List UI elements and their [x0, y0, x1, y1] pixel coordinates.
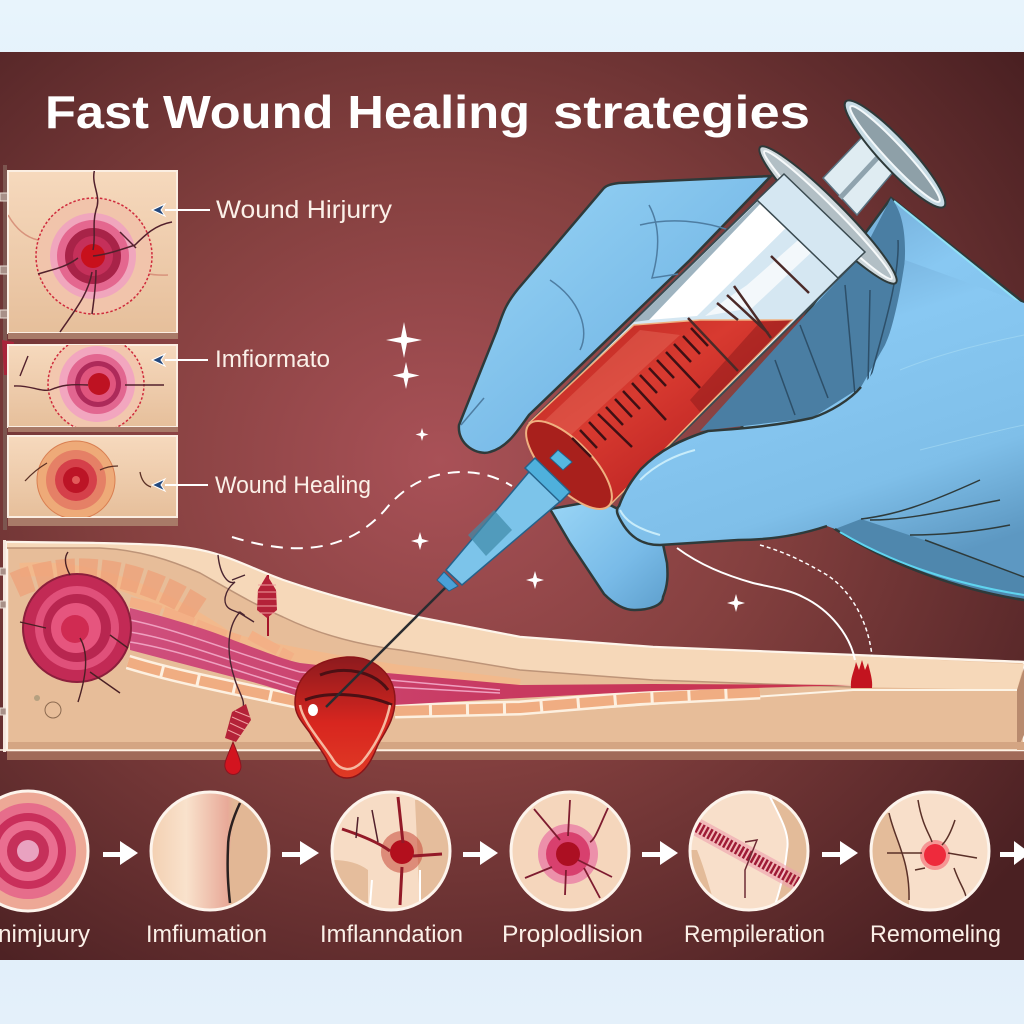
barrel opening [513, 408, 625, 522]
step 2 circle: influmation [151, 792, 270, 910]
arrow [1000, 841, 1024, 865]
panel: wound injury stage [8, 168, 178, 339]
step 6 circle: remodeling [865, 792, 989, 910]
arrow [822, 841, 858, 865]
step 1 circle: injury [0, 791, 88, 911]
blood fill [529, 320, 792, 506]
step labels: Remomeling [870, 921, 1001, 948]
hub and nozzle [446, 472, 563, 585]
title: strategies [553, 86, 810, 138]
arrow: wound injury [152, 204, 210, 216]
label: wound healing: Wound Healing [215, 472, 371, 499]
title: Fast Wound Healing [45, 86, 530, 138]
left wound rings [23, 574, 131, 682]
plunger [823, 91, 955, 217]
glove: lower finger [550, 500, 668, 610]
thin white curve, dashed curve and small wound [677, 545, 872, 688]
step 3 circle: inflammation [332, 792, 452, 915]
step labels [0, 921, 1001, 948]
title [45, 86, 810, 138]
glove: index and middle fingers [459, 176, 771, 453]
glove: thumb over syringe [617, 260, 1024, 600]
blood pool [295, 657, 395, 778]
barrel [529, 174, 865, 506]
arrow [463, 841, 498, 865]
step labels: Imflanndation [320, 921, 463, 948]
step labels: Proplodlision [502, 921, 643, 948]
blood drop small [225, 742, 241, 774]
panel: wound healing stage [8, 436, 178, 526]
fat cells upper [20, 569, 520, 686]
flange [750, 137, 906, 293]
dashed motion path [232, 472, 512, 548]
step 4 circle: proliferation [511, 792, 629, 910]
arrow [642, 841, 678, 865]
label: inflammation: Imfiormato [215, 346, 330, 373]
arrow [103, 841, 138, 865]
needle [326, 587, 446, 707]
skin cross-section [0, 542, 1024, 760]
panel: inflammation stage [8, 336, 178, 432]
arrow: inflammation [152, 354, 208, 366]
arrow: wound healing [152, 479, 208, 491]
graduation marks [572, 328, 708, 457]
cuff [835, 519, 1024, 600]
fat cells lower [128, 662, 760, 711]
step labels: Imfiumation [146, 921, 267, 948]
muscle band [130, 608, 853, 705]
sparkles [386, 322, 745, 612]
syringe [437, 91, 955, 591]
step labels: nimjuury [0, 921, 90, 948]
suture thread and stitches [218, 555, 277, 742]
label: wound injury: Wound Hirjurry [216, 196, 393, 224]
binder strip on left edge [0, 165, 15, 752]
arrow [282, 841, 319, 865]
step labels: Rempileration [684, 921, 825, 948]
glove: wrist and palm behind syringe [700, 198, 1024, 600]
step 5 circle: replication [685, 792, 812, 910]
